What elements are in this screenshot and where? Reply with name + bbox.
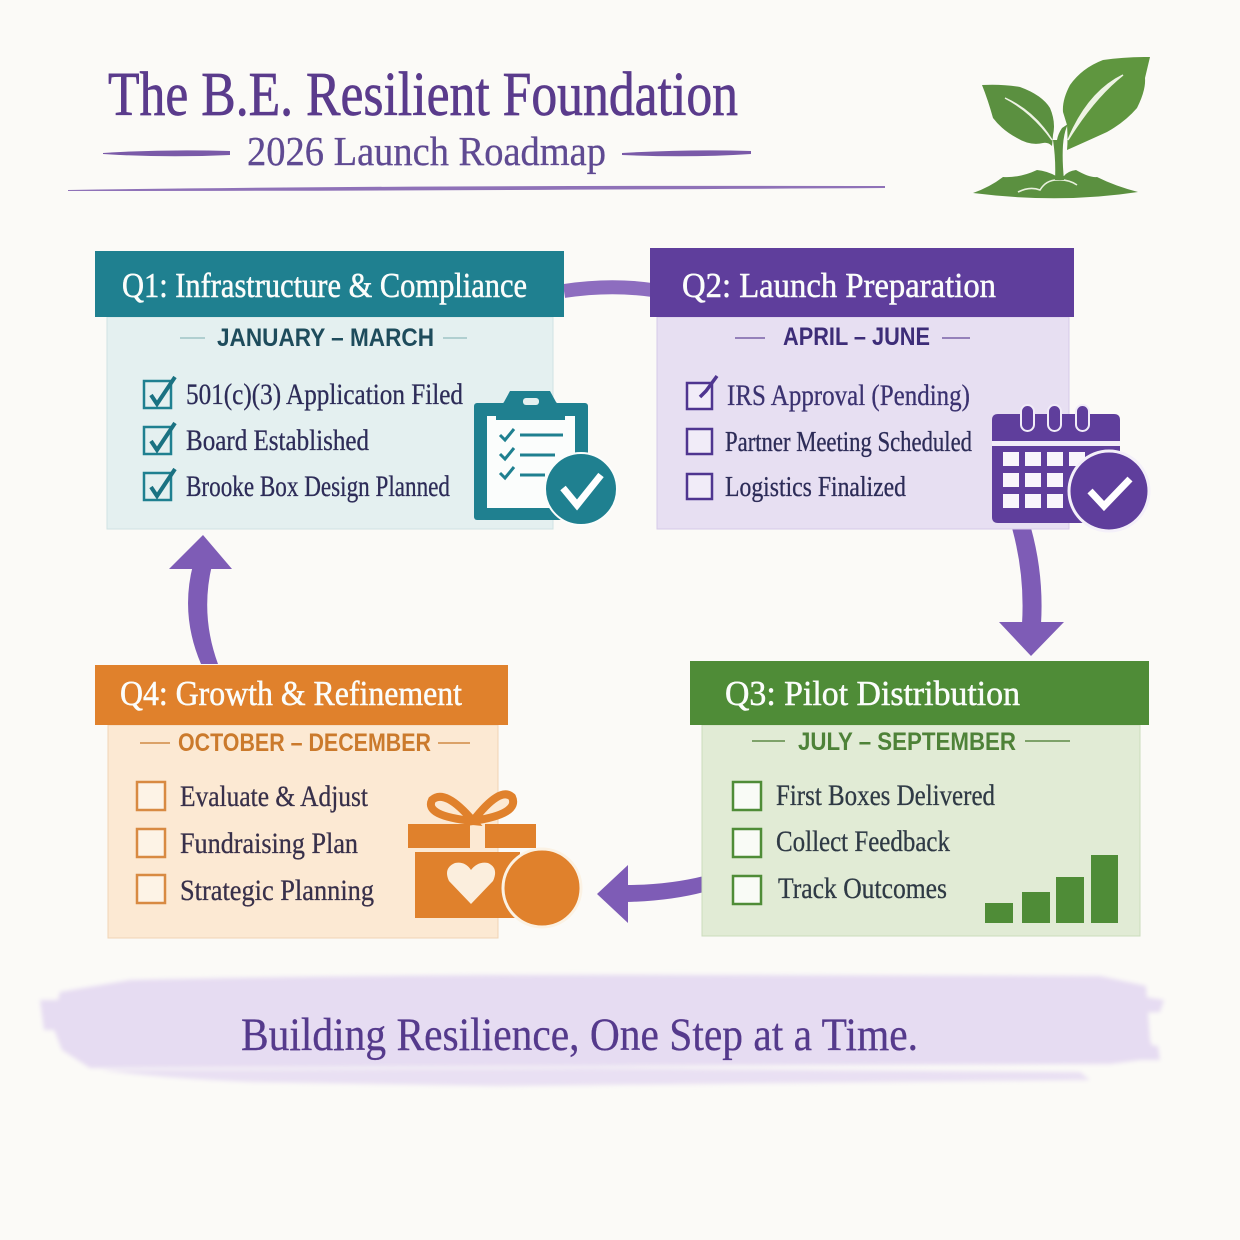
title block (68, 61, 885, 191)
Q1 checklist: Brooke Box Design Planned (186, 470, 450, 503)
arrow: Q4 to Q1 (169, 535, 232, 664)
arrow: Q3 to Q4 (597, 865, 704, 923)
Q3 checklist (733, 779, 995, 905)
Q3 header (690, 661, 1149, 725)
Q2 checklist: Partner Meeting Scheduled (725, 427, 972, 458)
Q1 header (95, 251, 564, 317)
connector: Q1 to Q2 (564, 287, 652, 291)
Q2 checklist: IRS Approval (Pending) (727, 379, 970, 412)
Q2 checklist: Logistics Finalized (725, 472, 906, 503)
Q1 header: Q1: Infrastructure & Compliance (122, 266, 527, 305)
Q2 header: Q2: Launch Preparation (682, 266, 996, 305)
icon: sprout (973, 57, 1150, 198)
Q2 header (650, 248, 1074, 317)
Q4 header (95, 665, 508, 725)
Q4 checklist (137, 780, 374, 907)
Q3 checklist: Track Outcomes (778, 872, 947, 905)
panel: Q3 (690, 661, 1149, 936)
panel: Q2 (650, 248, 1149, 531)
Q4 checklist: Strategic Planning (180, 874, 374, 907)
left leaf (982, 85, 1054, 146)
stem (1053, 124, 1068, 180)
Q3 checklist: First Boxes Delivered (776, 779, 995, 812)
title: The B.E. Resilient Foundation (108, 61, 738, 129)
Q3 checklist: Collect Feedback (776, 825, 950, 858)
Q4 checklist: Fundraising Plan (180, 827, 358, 860)
icon: calendar with check (992, 405, 1149, 531)
subtitle: 2026 Launch Roadmap (247, 128, 606, 174)
panel: Q1 (95, 251, 617, 529)
Q4 header: Q4: Growth & Refinement (120, 674, 462, 713)
Q1 checklist: 501(c)(3) Application Filed (186, 378, 463, 411)
panel: Q4 (95, 665, 581, 938)
icon: bar chart (985, 855, 1118, 923)
Q4 checklist: Evaluate & Adjust (180, 780, 369, 813)
right leaf (1063, 57, 1150, 150)
Q3 header: Q3: Pilot Distribution (725, 674, 1020, 713)
icon: clipboard with check (474, 391, 617, 525)
soil (973, 170, 1138, 198)
banner: tagline (40, 975, 1164, 1086)
arrow: Q2 to Q3 (999, 528, 1064, 656)
Q1 checklist (144, 377, 463, 503)
Q2 checklist (687, 376, 972, 503)
Q3 dates: JULY – SEPTEMBER (798, 728, 1016, 756)
icon: gift box with heart (408, 794, 581, 927)
Q1 checklist: Board Established (186, 424, 369, 457)
Q2 dates: APRIL – JUNE (783, 323, 930, 351)
banner: tagline: Building Resilience, One Step at a Time. (241, 1009, 918, 1061)
Q4 dates: OCTOBER – DECEMBER (178, 729, 431, 757)
Q1 dates: JANUARY – MARCH (217, 324, 434, 352)
